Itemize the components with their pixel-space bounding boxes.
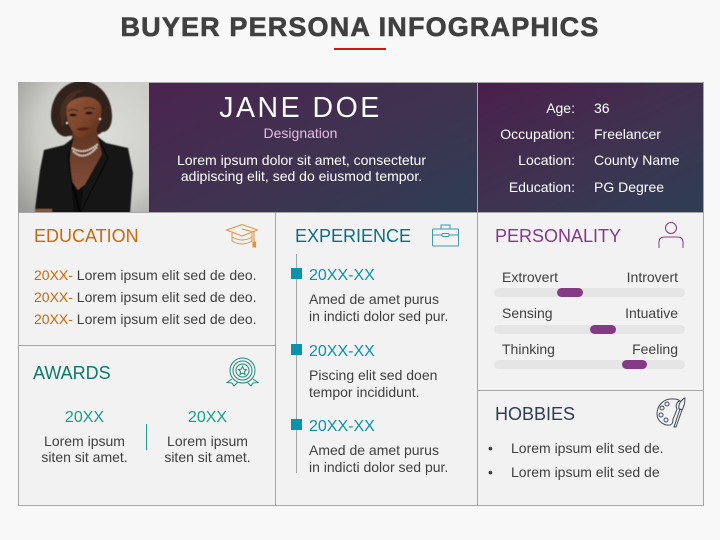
personality scale 3: Feeling	[632, 341, 678, 357]
timeline item 1	[291, 267, 448, 324]
divider: awards top	[18, 345, 276, 346]
heading: awards: AWARDS	[33, 363, 111, 383]
hobbies list: Lorem ipsum elit sed de.	[511, 440, 664, 456]
personality scale 3	[494, 341, 685, 369]
blazer	[35, 137, 133, 213]
icon: graduation cap	[225, 224, 259, 248]
summary text: Lorem ipsum dolor sit amet, consectetur	[177, 152, 426, 168]
timeline item 3: in indicti dolor sed pur.	[309, 459, 448, 475]
hobbies list: •	[488, 440, 493, 456]
timeline item 1: 20XX-XX	[309, 267, 375, 284]
timeline item 3: 20XX-XX	[309, 418, 375, 435]
personality scale 1	[494, 269, 685, 297]
personality scale 2	[494, 305, 685, 334]
inner top	[71, 180, 84, 213]
award 2	[164, 409, 251, 465]
education list	[34, 267, 257, 327]
eyes, brows and mouth	[69, 114, 77, 116]
timeline item 3: Amed de amet purus	[309, 442, 439, 458]
divider: column 1	[275, 212, 276, 505]
education list: 20XX- Lorem ipsum elit sed de deo.	[34, 311, 257, 327]
timeline item 2: Piscing elit sed doen	[309, 367, 437, 383]
summary text: adipiscing elit, sed do eiusmod tempor.	[181, 168, 422, 184]
personality scale 2: Sensing	[502, 305, 553, 321]
icon: paint palette	[656, 397, 686, 428]
title: BUYER PERSONA INFOGRAPHICS	[121, 12, 599, 42]
timeline item 2: tempor incididunt.	[309, 384, 420, 400]
detail labels and values: County Name	[594, 152, 680, 168]
necklace	[72, 144, 98, 156]
hand hint	[35, 209, 52, 212]
icon: briefcase	[432, 224, 459, 246]
panel: name banner	[149, 83, 477, 212]
timeline line	[296, 254, 297, 473]
education list: 20XX- Lorem ipsum elit sed de deo.	[34, 289, 257, 305]
designation: Designation	[264, 125, 337, 141]
award 2: Lorem ipsum	[167, 433, 248, 449]
icon: person	[658, 222, 684, 248]
personality scale 2: Intuative	[625, 305, 678, 321]
heading: personality: PERSONALITY	[495, 226, 621, 246]
award 1: Lorem ipsum	[44, 433, 125, 449]
award 1	[41, 409, 128, 465]
award 2: siten sit amet.	[164, 449, 251, 465]
award 1: 20XX	[65, 409, 104, 426]
hobbies list: •	[488, 464, 493, 480]
detail labels and values: 36	[594, 100, 610, 116]
personality scale 1: Extrovert	[502, 269, 558, 285]
personality scale 1: Introvert	[627, 269, 678, 285]
detail labels and values: PG Degree	[594, 179, 664, 195]
divider: column 2	[477, 212, 478, 505]
hair	[51, 81, 112, 137]
earrings	[66, 122, 68, 124]
face	[67, 97, 101, 139]
award 1: siten sit amet.	[41, 449, 128, 465]
lapels	[68, 137, 108, 213]
photo: portrait of woman in black blazer	[18, 82, 149, 212]
timeline item 2: 20XX-XX	[309, 343, 375, 360]
timeline item 1: in indicti dolor sed pur.	[309, 308, 448, 324]
divider: header bottom	[18, 212, 704, 213]
timeline item 1: Amed de amet purus	[309, 291, 439, 307]
timeline item 2	[291, 343, 437, 400]
personality scale 3: Thinking	[502, 341, 555, 357]
icon: award badge	[226, 358, 260, 387]
hobbies list: Lorem ipsum elit sed de	[511, 464, 660, 480]
award 2: 20XX	[188, 409, 227, 426]
detail labels and values: Freelancer	[594, 126, 661, 142]
detail labels and values: Occupation:	[500, 126, 575, 142]
heading: experience: EXPERIENCE	[295, 226, 411, 246]
summary text	[177, 152, 426, 184]
detail labels and values: Location:	[518, 152, 575, 168]
name: JANE DOE	[219, 92, 382, 124]
divider: header column	[477, 82, 478, 212]
title underline	[334, 48, 386, 50]
neck and chest	[70, 126, 102, 192]
heading: education: EDUCATION	[34, 226, 139, 246]
panel: card background	[18, 82, 704, 506]
detail labels and values: Age:	[546, 100, 575, 116]
panel: personal details	[478, 83, 703, 212]
education list: 20XX- Lorem ipsum elit sed de deo.	[34, 267, 257, 283]
detail labels and values	[500, 100, 680, 195]
timeline item 3	[291, 418, 448, 475]
hobbies list	[488, 440, 664, 480]
heading: hobbies: HOBBIES	[495, 404, 575, 424]
award separator	[146, 424, 147, 450]
detail labels and values: Education:	[509, 179, 575, 195]
divider: hobbies top	[477, 390, 703, 391]
